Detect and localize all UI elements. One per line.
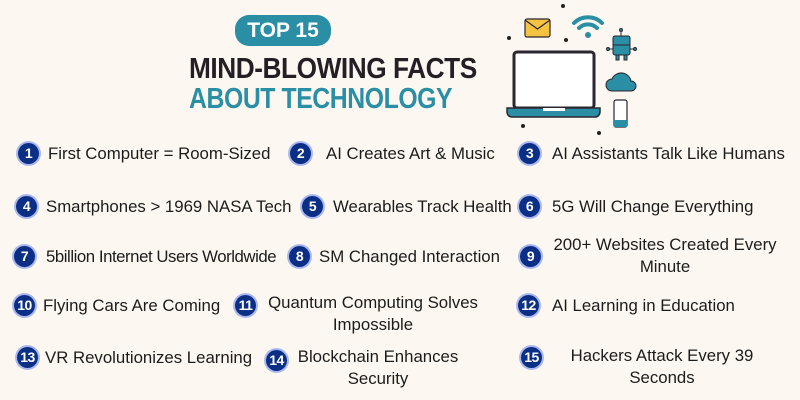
fact 6 (517, 194, 753, 219)
text: AI Creates Art & Music (326, 144, 495, 163)
fact 11 (233, 293, 478, 334)
text: Smartphones > 1969 NASA Tech (46, 197, 292, 216)
fact 8 (287, 244, 500, 269)
text: Wearables Track Health (333, 197, 512, 216)
text: Flying Cars Are Coming (43, 296, 220, 315)
text: 12 (521, 297, 536, 313)
text: 9 (527, 248, 534, 264)
text: Hackers Attack Every 39 (571, 346, 753, 365)
illustration: laptop with tech icons (506, 4, 637, 135)
text: Blockchain Enhances (298, 347, 458, 366)
text: AI Learning in Education (552, 296, 735, 315)
fact 10 (12, 293, 220, 318)
fact 1 (16, 141, 270, 166)
text: Quantum Computing Solves (268, 293, 478, 312)
fact 2 (288, 141, 495, 166)
text: SM Changed Interaction (319, 247, 500, 266)
title: MIND-BLOWING FACTS (189, 53, 477, 85)
text: 1 (25, 145, 32, 161)
text: 5 (309, 198, 316, 214)
fact 12 (516, 293, 735, 318)
text: VR Revolutionizes Learning (45, 348, 252, 367)
text: AI Assistants Talk Like Humans (552, 144, 785, 163)
text: 2 (297, 145, 304, 161)
text: 8 (296, 248, 303, 264)
fact 15 (519, 345, 753, 387)
text: 5G Will Change Everything (552, 197, 753, 216)
text: 14 (269, 352, 284, 368)
text: Security (348, 369, 408, 388)
fact 14 (264, 347, 458, 388)
title (189, 53, 477, 115)
text: First Computer = Room-Sized (48, 144, 270, 163)
text: Minute (640, 257, 690, 276)
text: 4 (23, 198, 30, 214)
fact 4 (14, 194, 292, 219)
fact 13 (15, 345, 252, 370)
text: 6 (526, 198, 533, 214)
text: Seconds (629, 368, 695, 387)
text: 7 (21, 248, 28, 264)
text: 200+ Websites Created Every (553, 235, 777, 254)
title badge: TOP 15 (247, 19, 319, 42)
title: ABOUT TECHNOLOGY (189, 83, 452, 115)
fact 9 (518, 235, 777, 276)
text: 11 (239, 297, 252, 313)
text: Impossible (333, 315, 413, 334)
title badge (235, 15, 331, 46)
text: 13 (20, 349, 35, 365)
text: 10 (17, 297, 32, 313)
fact 7 (12, 244, 276, 269)
text: 3 (526, 145, 533, 161)
fact 3 (517, 141, 785, 166)
fact 5 (300, 194, 512, 219)
text: 5billion Internet Users Worldwide (46, 247, 276, 266)
text: 15 (524, 349, 539, 365)
